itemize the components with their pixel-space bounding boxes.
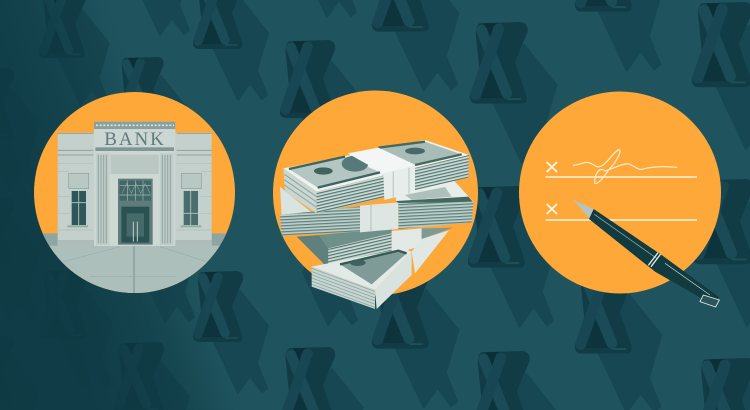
entrance <box>118 179 153 245</box>
signature line 1 <box>546 162 697 177</box>
panel: money <box>273 90 478 309</box>
ground and pavement <box>42 233 226 293</box>
right window <box>181 173 201 227</box>
bank photo <box>42 122 226 293</box>
orange circle: bank <box>34 92 235 293</box>
stack 1 <box>283 140 469 213</box>
stacks of cash <box>280 140 473 309</box>
stack 4 <box>312 248 412 309</box>
left window <box>67 173 89 227</box>
stack 2 <box>280 181 473 236</box>
bank sign: BANK <box>104 129 166 150</box>
icon: pen <box>573 199 719 307</box>
signature scribble <box>573 150 677 184</box>
panel: bank <box>34 92 235 293</box>
panel: signature <box>519 92 721 307</box>
stack 3 <box>297 228 453 273</box>
orange circle: money <box>273 90 478 296</box>
building facade <box>58 122 212 246</box>
signature line 2 <box>546 204 697 220</box>
contract lines <box>546 150 719 307</box>
orange circle: signature <box>519 92 721 294</box>
